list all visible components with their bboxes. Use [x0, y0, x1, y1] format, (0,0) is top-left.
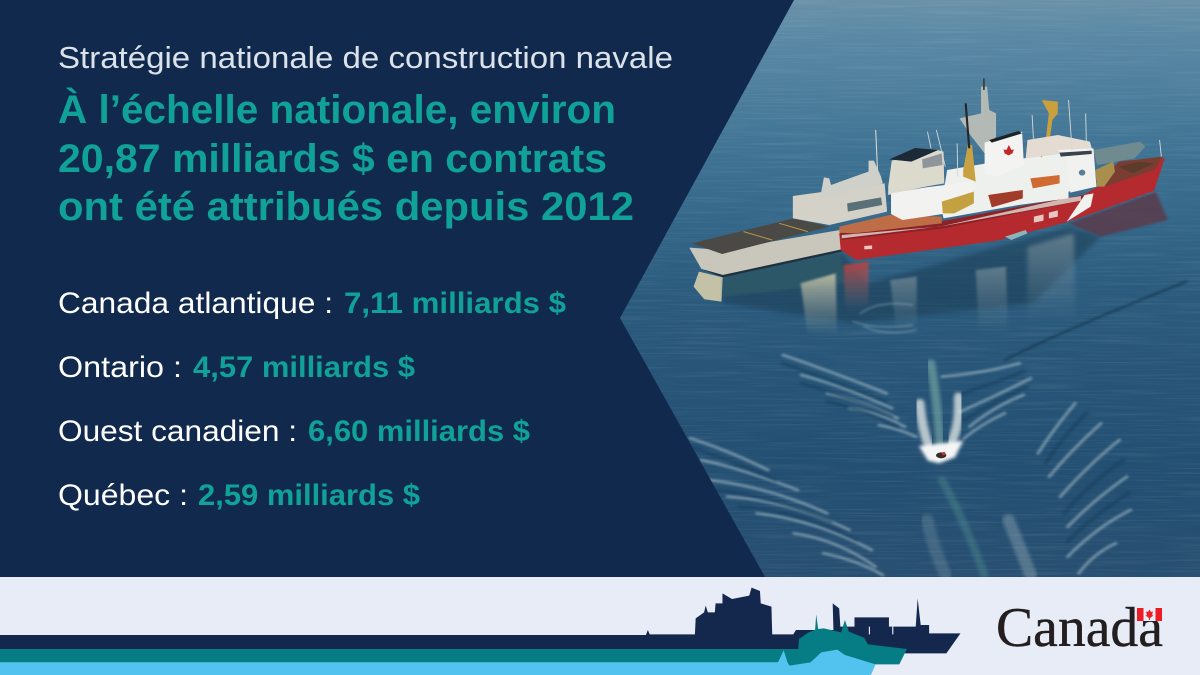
- yellow crane: [942, 192, 974, 213]
- funnel tower: [985, 132, 1024, 177]
- frigate hull: [689, 230, 842, 275]
- heading line 2: 20,87 milliards $ en contrats: [58, 137, 607, 181]
- frigate domes and mast: [820, 161, 883, 198]
- rear white deck: [1026, 135, 1092, 158]
- frigate rear tower: [888, 150, 944, 195]
- wheelhouse windows: [1060, 151, 1092, 157]
- photo: ships on the water: [600, 0, 1200, 577]
- heading: [58, 87, 634, 229]
- tower window: [922, 153, 942, 168]
- green central wake ahead: [931, 363, 940, 447]
- Canada wordmark: [996, 597, 1163, 659]
- title: Stratégie nationale de construction navale: [58, 40, 673, 75]
- navy panel: [0, 0, 794, 577]
- wordmark text: Canada: [996, 597, 1163, 659]
- hull lettering marks: [864, 210, 1058, 249]
- Western Canada: [58, 415, 530, 448]
- Quebec: Québec :: [58, 479, 188, 512]
- Atlantic Canada: [58, 287, 566, 320]
- small masts: [927, 100, 1161, 177]
- main mast lattice: [960, 87, 996, 153]
- maple leaf: [1004, 145, 1014, 155]
- ship silhouettes: [0, 588, 961, 675]
- side window strip: [842, 196, 1081, 238]
- far wake line: [1005, 282, 1186, 360]
- funnel top: [989, 131, 1022, 143]
- teal ship silhouette: [0, 614, 907, 667]
- Quebec: [58, 479, 420, 512]
- rear red deck details: [1119, 162, 1154, 173]
- wheelhouse: [1058, 148, 1096, 193]
- heading line 3: ont été attribués depuis 2012: [58, 185, 634, 229]
- rear deck: [1097, 157, 1163, 187]
- navy ship silhouette: [0, 588, 961, 653]
- boat foam: [919, 441, 963, 463]
- frigate side windows: [847, 197, 882, 212]
- Ontario: [58, 351, 415, 384]
- circular ripples near ship: [853, 304, 916, 333]
- tower roof: [889, 148, 938, 162]
- Ontario: Ontario :: [58, 351, 182, 384]
- white cargo block: [891, 182, 973, 220]
- Atlantic Canada: Canada atlantique :: [58, 287, 333, 320]
- yellow crane arm: [1038, 100, 1058, 157]
- water ripple texture: [600, 0, 1200, 577]
- frigate superstructure: [793, 183, 887, 225]
- frigate waterline: [701, 249, 842, 277]
- yellow stern equipment: [1095, 162, 1115, 187]
- frigate deck markings: [744, 223, 808, 240]
- Atlantic Canada: 7,11 milliards $: [344, 287, 566, 320]
- Quebec: 2,59 milliards $: [198, 479, 420, 512]
- water background: [600, 0, 1200, 577]
- Western Canada: 6,60 milliards $: [308, 415, 530, 448]
- white superstructure deck: [940, 148, 1096, 218]
- soft light ripples: [690, 355, 1131, 575]
- white spray: [920, 403, 929, 447]
- regional amounts list: [58, 287, 566, 512]
- flag: [1137, 608, 1162, 621]
- small boat: [936, 452, 946, 458]
- Western Canada: Ouest canadien :: [58, 415, 297, 448]
- navy deck slots: [869, 627, 893, 634]
- footer band: [0, 577, 1200, 675]
- yellow post: [963, 145, 976, 182]
- wake reflection below: [942, 480, 984, 575]
- helideck: [839, 215, 942, 233]
- orange lifeboats: [1030, 175, 1060, 188]
- Ontario: 4,57 milliards $: [193, 351, 415, 384]
- ships: [689, 78, 1165, 277]
- grey rear ship: [1094, 142, 1145, 165]
- upper hull shadow: [839, 195, 1085, 240]
- red icebreaker hull: [839, 157, 1165, 260]
- heading line 1: À l’échelle nationale, environ: [58, 87, 616, 132]
- frigate deck: [692, 218, 829, 254]
- dark ripple troughs: [694, 363, 1129, 542]
- water wake and ripples: [690, 282, 1186, 575]
- ship reflections: [694, 192, 1168, 337]
- emblem: [1079, 170, 1085, 176]
- white hull stripe: [1067, 193, 1094, 222]
- tender boat: [1005, 230, 1027, 240]
- light blue ship silhouette: [0, 650, 876, 675]
